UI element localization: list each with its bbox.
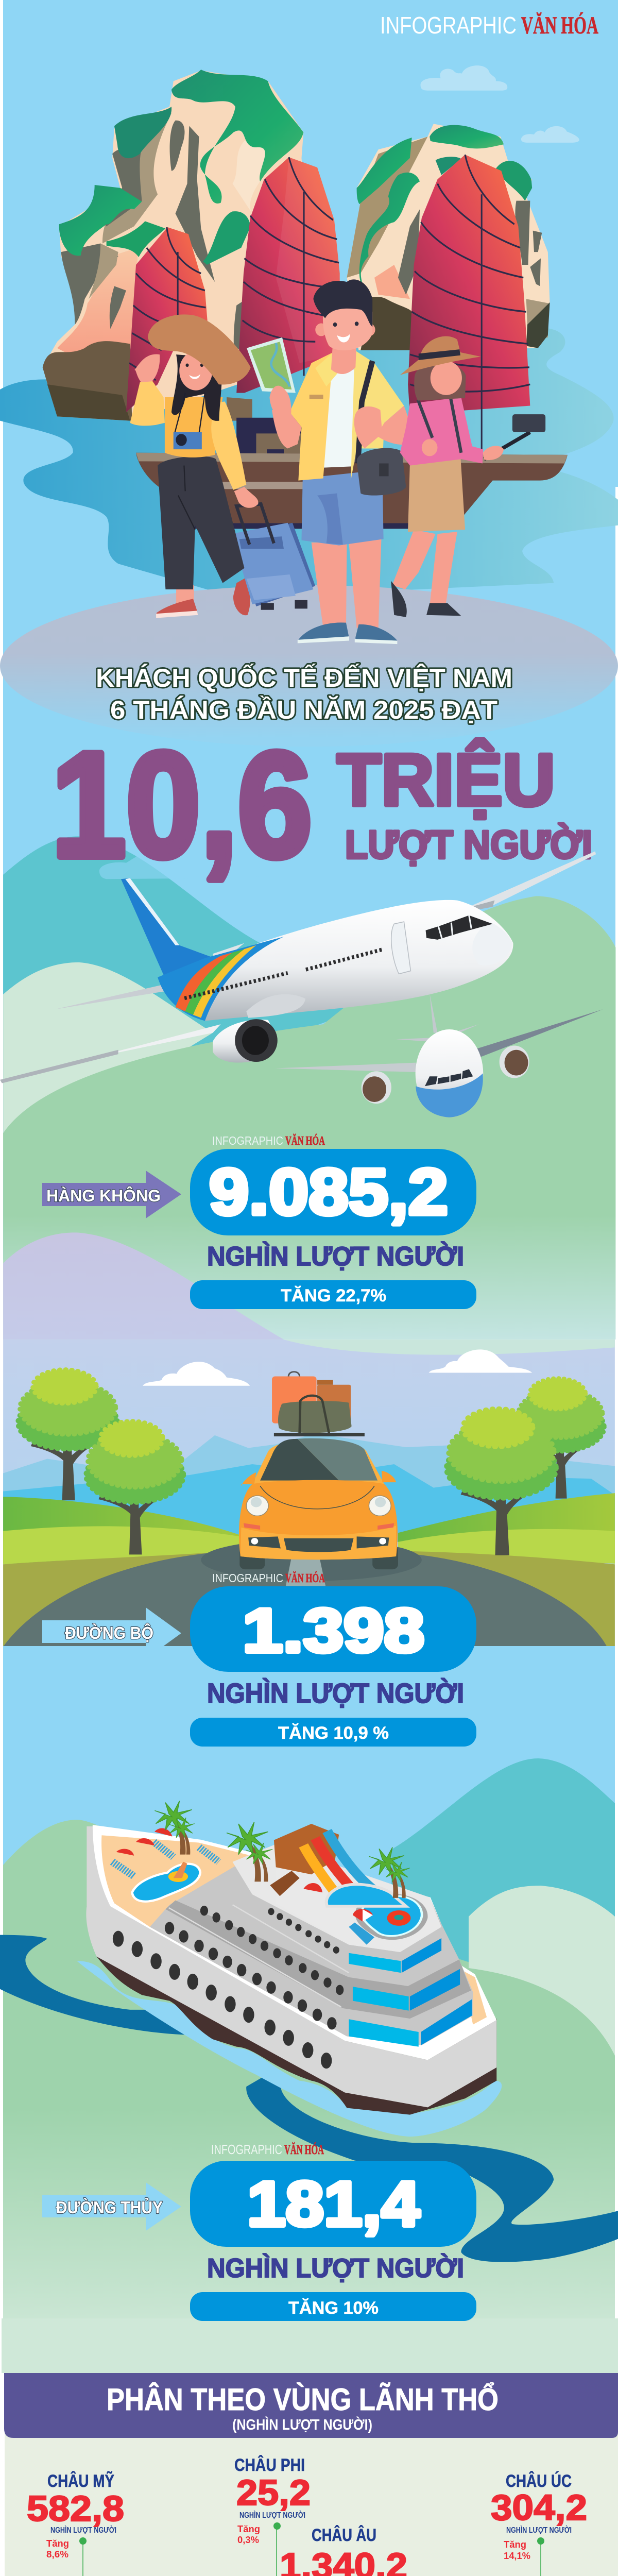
- limestone rock: left: [43, 70, 339, 421]
- callout: châu Phi: 25,2: [236, 2472, 311, 2513]
- callout: châu Mỹ: NGHÌN LƯỢT NGƯỜI: [50, 2525, 116, 2535]
- small logo: INFOGRAPHIC: [211, 2142, 282, 2157]
- pool deck top: [276, 1847, 441, 1952]
- callout: châu Phi: Tăng: [237, 2524, 260, 2534]
- callout: châu Mỹ: CHÂU MỸ: [47, 2471, 114, 2491]
- man with map and shoulder bag: [247, 279, 414, 644]
- small logo: INFOGRAPHIC: [212, 1571, 283, 1585]
- value pill: [190, 1149, 476, 1235]
- card: đường thủy: TĂNG 10%: [288, 2298, 379, 2318]
- ship top: beach, pool, palms and water slides: [112, 1801, 410, 1906]
- icon: cruise ship: [77, 1825, 502, 2137]
- callout: châu Mỹ: 8,6%: [46, 2549, 68, 2560]
- growth pill: [190, 2292, 476, 2321]
- header logo: INFOGRAPHIC: [380, 12, 517, 39]
- title: khách quốc tế: [96, 663, 512, 724]
- water splash: [77, 1961, 502, 2137]
- small logo: INFOGRAPHIC: [212, 1134, 283, 1147]
- headline number 10,6 triệu lượt người: TRIỆU: [337, 739, 555, 821]
- panel: air hills background: [3, 836, 615, 1340]
- deck levels: [150, 1856, 473, 2045]
- headline number 10,6 triệu lượt người: [52, 721, 592, 888]
- river: [0, 1935, 618, 2262]
- panel: cruise background: [2, 1758, 618, 2373]
- headline number 10,6 triệu lượt người: LƯỢT NGƯỜI: [345, 823, 592, 867]
- callout: châu Úc: Tăng: [504, 2539, 526, 2550]
- card: đường thủy: 181,4: [247, 2169, 420, 2240]
- woman with straw hat and suitcase: [130, 314, 315, 618]
- clouds: [99, 843, 265, 879]
- panel: world map background: [5, 2421, 618, 2576]
- arrow label: ĐƯỜNG THỦY: [56, 2198, 163, 2217]
- callout: châu Âu: [280, 2526, 407, 2576]
- value pill: [190, 1586, 476, 1672]
- panel: Ha Long bay scene: [0, 65, 618, 747]
- card: hàng không: [42, 1134, 476, 1309]
- three travellers: [130, 279, 545, 644]
- card: đường bộ: TĂNG 10,9 %: [278, 1723, 389, 1743]
- beach deck: [101, 1835, 252, 1927]
- card: hàng không: 9.085,2: [209, 1155, 448, 1228]
- trees: [19, 1370, 117, 1500]
- small logo: VĂN HÓA: [284, 2142, 324, 2157]
- card: đường thủy: [42, 2142, 476, 2321]
- junk boat hull: [136, 397, 568, 529]
- callout: châu Phi: 0,3%: [237, 2535, 259, 2545]
- callout: châu Phi: CHÂU PHI: [234, 2455, 305, 2475]
- ground: [0, 585, 618, 747]
- hull: [87, 1906, 496, 2115]
- icon: small front-view airplane: [275, 993, 603, 1117]
- panel: road scene: [3, 1340, 615, 1647]
- callout: châu Âu: CHÂU ÂU: [312, 2526, 376, 2545]
- growth pill: [190, 1718, 476, 1747]
- pale hill: [3, 962, 213, 1161]
- callout: châu Úc: [491, 2471, 587, 2576]
- value pill: [190, 2161, 476, 2247]
- junk boat sails: [126, 155, 530, 453]
- hills: [3, 1497, 244, 1564]
- title: khách quốc tế: KHÁCH QUỐC TẾ ĐẾN VIỆT NAM: [96, 663, 512, 692]
- arrow label: ĐƯỜNG BỘ: [65, 1623, 153, 1642]
- card: hàng không: NGHÌN LƯỢT NGƯỜI: [207, 1242, 464, 1272]
- growth pill: [190, 1280, 476, 1309]
- icon: large passenger airplane: [0, 851, 596, 1083]
- panel: sky background: [3, 0, 618, 487]
- card: đường bộ: [42, 1571, 476, 1747]
- panel: sea background: [3, 1646, 615, 2110]
- callout: châu Úc: CHÂU ÚC: [506, 2471, 572, 2491]
- road: [3, 1551, 607, 1647]
- windows and glass: [349, 1953, 419, 2047]
- arrow label: HÀNG KHÔNG: [46, 1187, 161, 1205]
- card: hàng không: TĂNG 22,7%: [281, 1286, 386, 1306]
- clouds: [421, 65, 579, 143]
- teal hill: [3, 836, 355, 1140]
- small logo: VĂN HÓA: [285, 1134, 325, 1148]
- arrow label: [42, 1607, 181, 1659]
- card: đường bộ: NGHÌN LƯỢT NGƯỜI: [207, 1678, 464, 1709]
- arrow label: [42, 2182, 181, 2231]
- callout: châu Mỹ: 582,8: [27, 2488, 124, 2529]
- small logo: VĂN HÓA: [285, 1571, 325, 1585]
- clouds: [143, 1362, 250, 1386]
- arrow label: [42, 1171, 181, 1218]
- water: [0, 328, 618, 598]
- title: khách quốc tế: 6 THÁNG ĐẦU NĂM 2025 ĐẠT: [110, 696, 497, 724]
- headline number 10,6 triệu lượt người: 10,6: [52, 721, 312, 888]
- woman with selfie stick: [391, 336, 545, 617]
- callout: châu Phi: [234, 2455, 311, 2576]
- callout: châu Phi: NGHÌN LƯỢT NGƯỜI: [239, 2510, 305, 2520]
- heading: phân theo vùng lãnh thổ: (NGHÌN LƯỢT NGƯỜI): [232, 2416, 372, 2433]
- lavender hill: [3, 1232, 284, 1340]
- car with luggage: [239, 1372, 398, 1569]
- callout: châu Mỹ: [27, 2471, 124, 2576]
- limestone rock: right: [347, 124, 550, 350]
- card: đường bộ: 1.398: [243, 1596, 424, 1665]
- mountains: [3, 1433, 615, 1510]
- heading: phân theo vùng lãnh thổ: [4, 2373, 618, 2438]
- callout: châu Úc: 14,1%: [504, 2551, 530, 2561]
- heading: phân theo vùng lãnh thổ: PHÂN THEO VÙNG LÃNH THỔ: [107, 2382, 499, 2417]
- card: đường thủy: NGHÌN LƯỢT NGƯỜI: [207, 2253, 464, 2283]
- callout: châu Mỹ: Tăng: [46, 2538, 69, 2549]
- callout: châu Úc: 304,2: [491, 2487, 587, 2528]
- callout: châu Úc: NGHÌN LƯỢT NGƯỜI: [506, 2525, 572, 2535]
- hull side: [86, 1826, 496, 2107]
- green hill: [3, 896, 615, 1340]
